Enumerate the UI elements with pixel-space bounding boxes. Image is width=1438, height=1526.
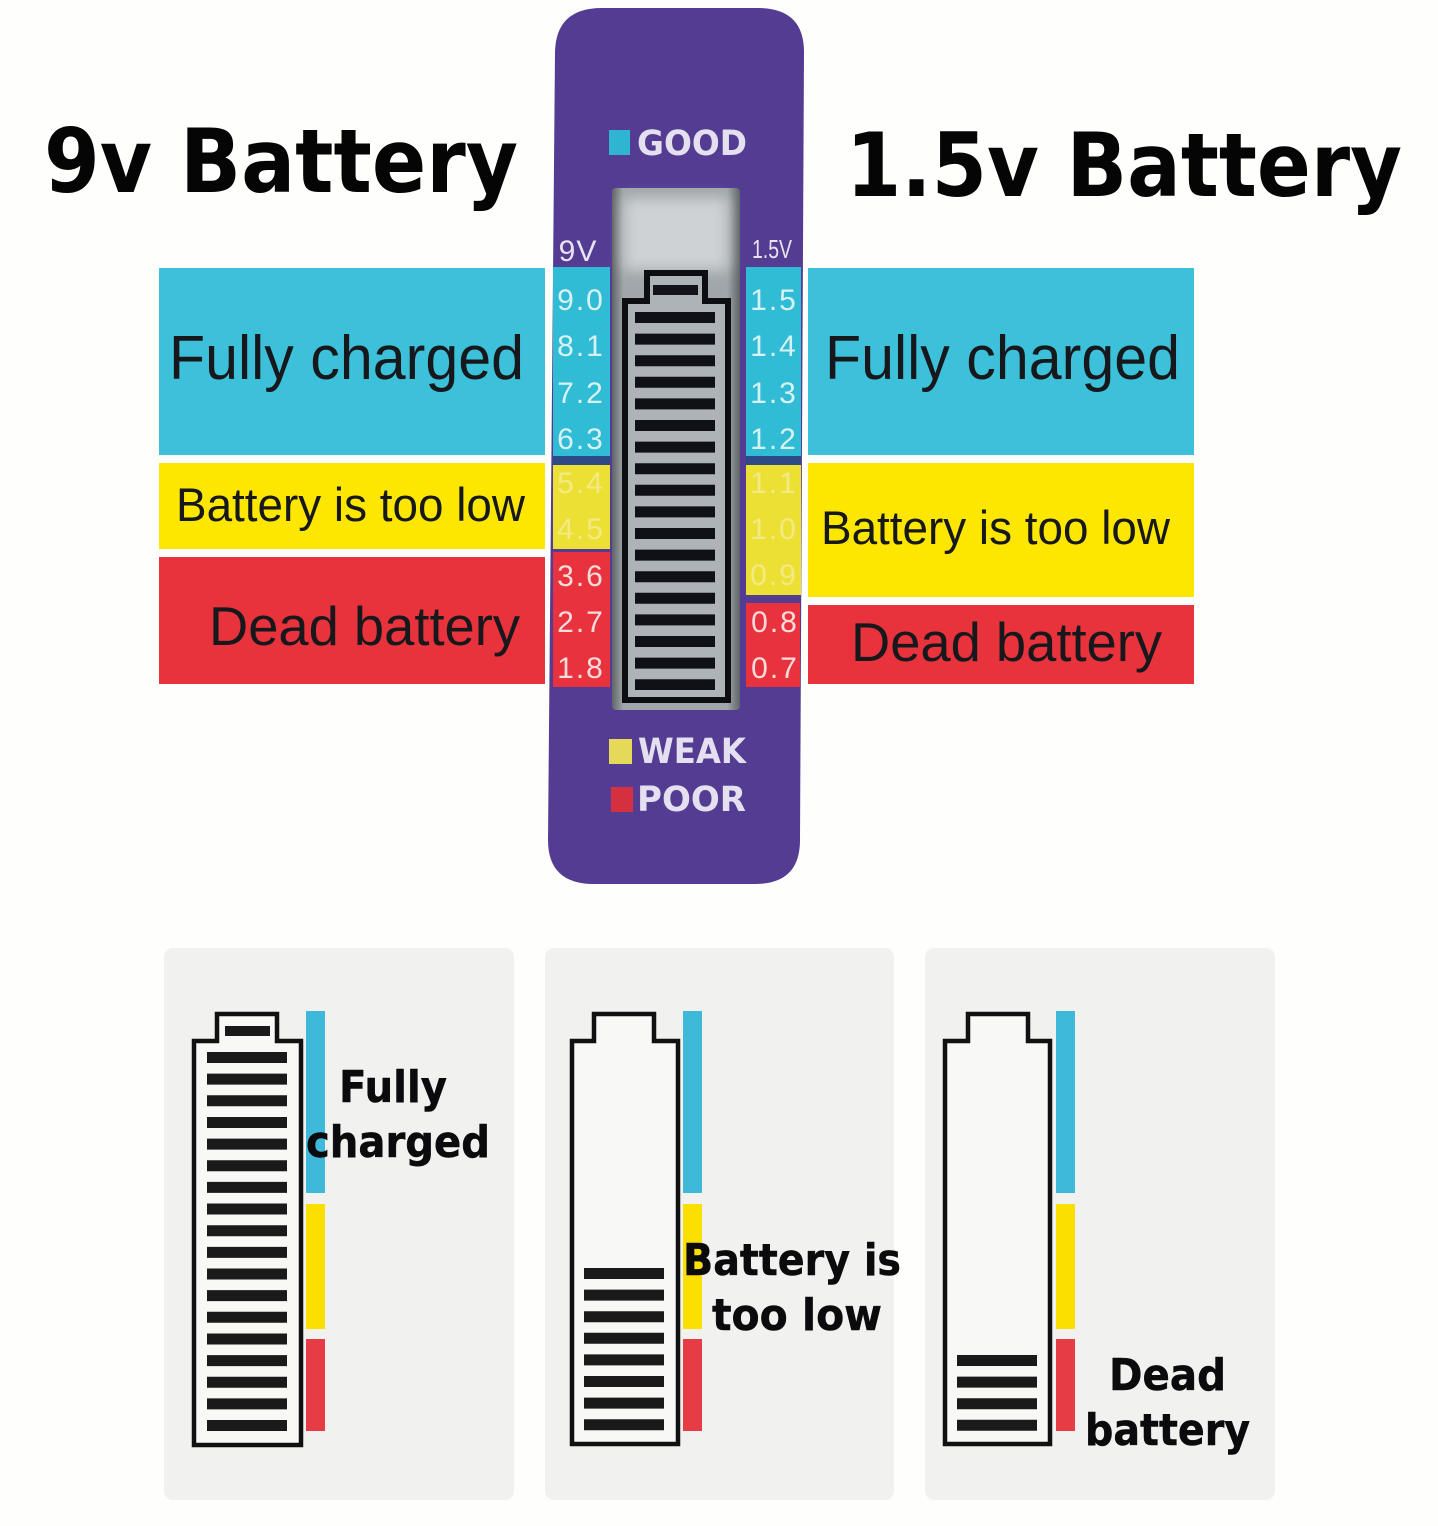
column: 1.5v scale: 1.0: [750, 513, 798, 546]
column: 1.5v scale: [746, 234, 801, 687]
title: 9v Battery: 9v Battery: [44, 110, 518, 213]
column: 1.5v scale: 1.2: [750, 423, 798, 456]
column: 9v scale: 4.5: [557, 513, 605, 546]
label: dead battery 1.5v: Dead battery: [851, 611, 1162, 673]
label: dead battery: battery: [1085, 1405, 1250, 1456]
panel: battery too low card: [545, 948, 901, 1500]
column: 1.5v scale: 1.5: [750, 284, 798, 317]
column: 1.5v scale: 1.1: [750, 467, 798, 500]
legend: weak: WEAK: [638, 732, 748, 772]
label: battery is too low: [683, 1235, 901, 1341]
label: fully charged: charged: [306, 1117, 490, 1168]
icon: low battery: [572, 1014, 678, 1444]
column: 9v scale: 5.4: [557, 467, 605, 500]
level strip: [1056, 1011, 1075, 1431]
column: 1.5v scale: 1.5V: [752, 234, 792, 264]
panel: battery tester device: [548, 8, 804, 884]
icon: main battery indicator: [625, 273, 728, 700]
column: 1.5v scale: 1.4: [750, 330, 798, 363]
column: 1.5v scale: 0.9: [750, 559, 798, 592]
level strip: [683, 1011, 702, 1431]
column: 9v scale: 9V: [559, 235, 597, 268]
label: fully charged: Fully: [339, 1062, 447, 1113]
panel: fully charged card: [164, 948, 514, 1500]
level strip: [306, 1011, 325, 1431]
label: fully charged 9v: Fully charged: [169, 324, 524, 393]
column: 1.5v scale: 0.8: [751, 606, 799, 639]
column: 9v scale: 3.6: [557, 560, 605, 593]
panel: dead battery card: [925, 948, 1275, 1500]
column: 9v scale: 9.0: [557, 284, 605, 317]
legend: poor: POOR: [637, 780, 746, 820]
panel: 9v status bands: [159, 268, 545, 684]
column: 1.5v scale: 0.7: [751, 652, 799, 685]
label: dead battery 9v: Dead battery: [209, 595, 520, 657]
icon: dead battery: [945, 1014, 1050, 1444]
label: battery is too low: too low: [712, 1290, 882, 1341]
column: 1.5v scale: 1.3: [750, 377, 798, 410]
column: 9v scale: [553, 235, 610, 687]
label: battery is too low 9v: Battery is too low: [176, 478, 526, 531]
column: 9v scale: 8.1: [557, 330, 605, 363]
tester screen: [612, 188, 740, 710]
label: dead battery: Dead: [1109, 1350, 1226, 1401]
label: battery is too low: Battery is: [683, 1235, 901, 1286]
panel: 1.5v status bands: [808, 268, 1194, 684]
legend: good: GOOD: [637, 124, 747, 164]
icon: full battery: [194, 1014, 301, 1445]
label: fully charged 1.5v: Fully charged: [825, 324, 1180, 393]
label: battery is too low 1.5v: Battery is too low: [821, 501, 1171, 554]
label: dead battery: [1085, 1350, 1250, 1456]
column: 9v scale: 2.7: [557, 606, 605, 639]
column: 9v scale: 6.3: [557, 423, 605, 456]
column: 9v scale: 1.8: [557, 652, 605, 685]
column: 9v scale: 7.2: [557, 377, 605, 410]
label: fully charged: [306, 1062, 490, 1168]
